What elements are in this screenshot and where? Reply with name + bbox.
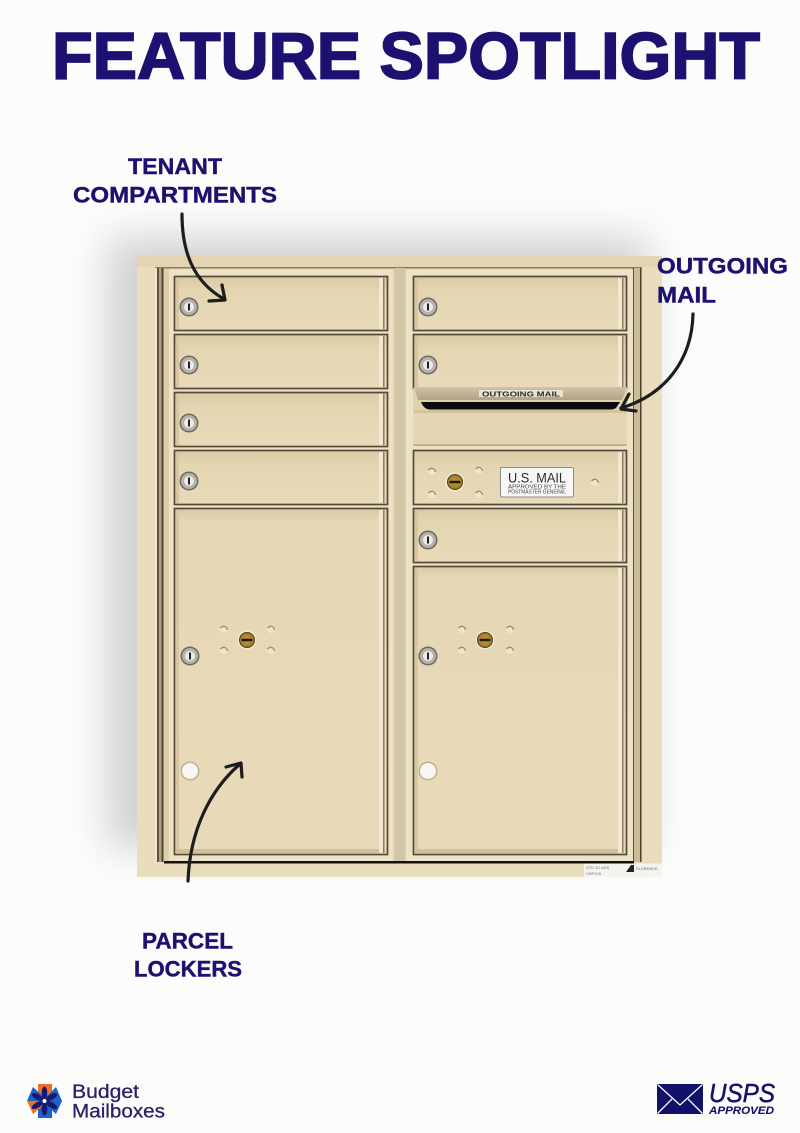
- arrow: outgoing mail: [621, 314, 693, 411]
- label: tenant compartments: [73, 154, 277, 208]
- tenant compartment 5: [414, 276, 626, 330]
- label: outgoing mail: OUTGOING: [657, 254, 788, 278]
- US Mail plate: U.S. MAIL: [508, 470, 566, 486]
- tenant compartment 2: [174, 334, 388, 388]
- USPS wordmark: APPROVED: [708, 1105, 774, 1117]
- icon: envelope: [657, 1084, 703, 1114]
- approval sticker: USPS-B: [586, 871, 601, 876]
- right rail lines: [632, 268, 634, 862]
- tenant compartment 6: [414, 334, 626, 388]
- logo wordmark: [72, 1081, 165, 1122]
- title: FEATURE SPOTLIGHT: [52, 18, 760, 92]
- arrow: parcel lockers: [188, 763, 242, 881]
- logo wordmark: Mailboxes: [72, 1100, 165, 1122]
- tenant compartment 3: [174, 392, 388, 446]
- left column doors: [174, 276, 388, 854]
- logo wordmark: Budget: [72, 1081, 140, 1103]
- arrow: tenant compartments: [182, 214, 225, 301]
- right column doors: [413, 276, 627, 854]
- approval sticker: [584, 864, 662, 877]
- master door with US Mail plate: [414, 450, 626, 504]
- logo: Budget Mailboxes: [27, 1081, 165, 1122]
- US Mail plate: APPROVED BY THE: [508, 484, 567, 490]
- tenant compartment 1: [174, 276, 388, 330]
- label: tenant compartments: COMPARTMENTS: [73, 182, 277, 208]
- label: outgoing mail: [657, 254, 788, 308]
- USPS wordmark: USPS: [709, 1078, 776, 1108]
- logo: USPS approved: [657, 1078, 776, 1117]
- outgoing mail slot: [413, 387, 627, 446]
- tenant compartment 4: [174, 450, 388, 504]
- bottom channel: [164, 861, 634, 864]
- label: tenant compartments: TENANT: [128, 154, 223, 179]
- left rail lines: [155, 268, 157, 862]
- parcel locker right: [414, 566, 626, 854]
- parcel locker left: [174, 508, 388, 854]
- door column backing: [169, 269, 393, 861]
- tenant compartment 7: [414, 508, 626, 562]
- drop shadow: [108, 238, 648, 848]
- slot label: OUTGOING MAIL: [482, 390, 561, 398]
- US Mail plate: POSTMASTER GENERAL: [508, 490, 566, 496]
- label: parcel lockers: [134, 928, 242, 982]
- label: parcel lockers: PARCEL: [142, 928, 233, 954]
- approval sticker: FLORENCE: [636, 866, 658, 871]
- approval sticker: STD 4C ADS: [586, 865, 610, 870]
- centre divider: [395, 268, 405, 861]
- label: outgoing mail: MAIL: [657, 282, 716, 308]
- icon: logo flower: [27, 1084, 62, 1118]
- US Mail plate: [500, 468, 574, 497]
- label: parcel lockers: LOCKERS: [134, 956, 242, 982]
- mailbox unit: [108, 238, 662, 877]
- outer frame: [137, 256, 662, 877]
